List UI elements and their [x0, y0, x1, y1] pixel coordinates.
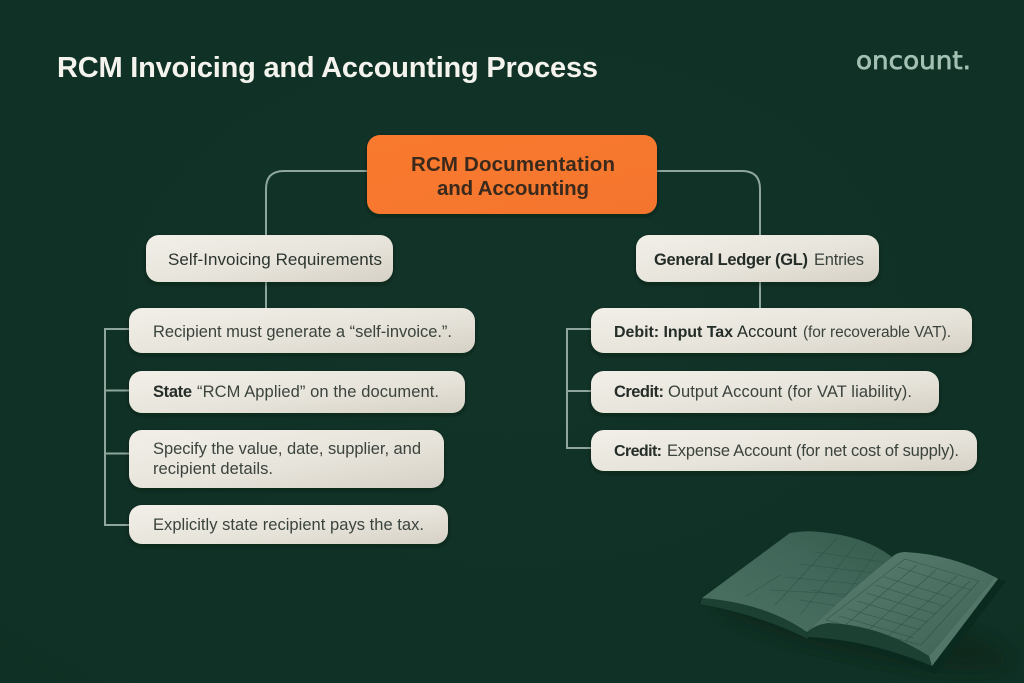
item: specify details: recipient details. [153, 460, 273, 478]
left bracket connector [105, 329, 129, 525]
panel: self-invoicing requirements [129, 235, 475, 544]
heading: general ledger entries [636, 235, 879, 282]
item: specify details: Specify the value, date, supplier, and [153, 440, 421, 458]
item: credit expense account [591, 430, 977, 471]
item: state RCM applied: State [153, 383, 192, 401]
heading: self-invoicing requirements: Self-Invoicing Requirements [168, 250, 382, 269]
item: specify details [129, 430, 444, 488]
item: state RCM applied [129, 371, 465, 413]
root node: RCM Documentation and Accounting [367, 135, 657, 214]
icon: open ledger book [700, 531, 998, 666]
connectors from root to branches [266, 171, 760, 308]
item: debit input tax account [591, 308, 972, 353]
item: debit input tax account: Debit: Input Tax [614, 324, 733, 341]
item: generate self-invoice: Recipient must generate a “self-invoice.”. [153, 323, 452, 341]
panel: general ledger entries [591, 235, 977, 471]
book cover and page block [698, 579, 1006, 674]
title: RCM Invoicing and Accounting Process [57, 52, 598, 84]
item: generate self-invoice [129, 308, 475, 353]
item: state RCM applied: “RCM Applied” on the document. [197, 383, 439, 401]
left page [702, 531, 892, 632]
root node: RCM Documentation and Accounting: and Accounting [437, 177, 589, 200]
root node: RCM Documentation and Accounting: RCM Documentation [411, 153, 615, 176]
ledger grid lines [745, 537, 979, 645]
item: debit input tax account: Account [737, 323, 797, 341]
item: recipient pays the tax: Explicitly state recipient pays the tax. [153, 516, 424, 534]
heading: self-invoicing requirements [146, 235, 393, 282]
item: credit expense account: Expense Account (for net cost of supply). [667, 442, 959, 460]
item: recipient pays the tax [129, 505, 448, 544]
item: credit output account: Output Account (for VAT liability). [668, 383, 912, 401]
item: debit input tax account: (for recoverable VAT). [803, 324, 951, 341]
item: credit expense account: Credit: [614, 443, 662, 460]
right bracket connector [567, 329, 591, 448]
right page [807, 552, 995, 656]
heading: general ledger entries: General Ledger (GL) [654, 251, 808, 269]
item: credit output account: Credit: [614, 383, 664, 401]
logo: oncount: oncount. [856, 46, 971, 75]
item: credit output account [591, 371, 939, 413]
heading: general ledger entries: Entries [814, 251, 864, 269]
